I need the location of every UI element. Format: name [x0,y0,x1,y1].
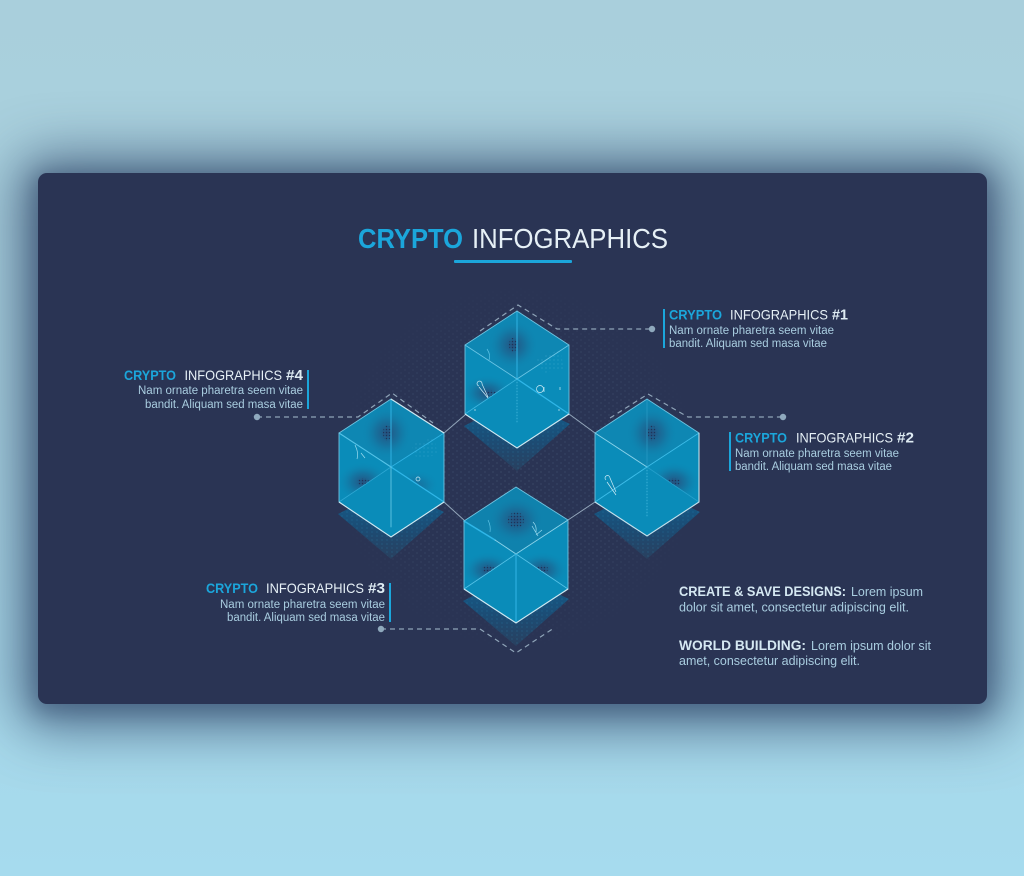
text block: create and save designs: CREATE & SAVE DESIGNS: [679,584,846,599]
title underline [454,260,572,263]
cube 1: top [461,311,570,471]
text block: infographics 2: CRYPTO [735,430,787,446]
dotted background circle [356,300,678,634]
text block: infographics 2 [729,430,914,473]
panel: dark slide [38,173,987,704]
text block: infographics 3: Nam ornate pharetra seem vitae [220,599,385,611]
text block: infographics 3 [206,580,391,624]
text block: world building [679,638,931,668]
dashed leader 1 [480,305,655,332]
text block: create and save designs: dolor sit amet, consectetur adipiscing elit. [679,600,909,614]
text block: infographics 3: INFOGRAPHICS [266,580,364,596]
icon: small drawn marks [488,520,542,536]
text block: create and save designs: Lorem ipsum [851,584,923,599]
text block: infographics 4: Nam ornate pharetra seem vitae [138,385,303,397]
icon: small drawn marks [355,445,420,481]
text block: infographics 4: CRYPTO [124,367,176,383]
text block: infographics 3: bandit. Aliquam sed masa vitae [227,612,385,624]
dashed leader 3 [378,626,554,653]
text block: world building: Lorem ipsum dolor sit [811,638,931,653]
text block: infographics 4 [124,367,309,411]
cube 3: bottom [462,487,569,646]
text block: infographics 4: INFOGRAPHICS [184,367,282,383]
text block: infographics 2: INFOGRAPHICS [796,430,893,446]
text block: infographics 4: #4 [286,368,303,384]
text block: infographics 1: CRYPTO [669,306,722,322]
text block: infographics 1: bandit. Aliquam sed masa vitae [669,338,827,350]
text block: create and save designs [679,584,923,614]
text block: world building: WORLD BUILDING: [679,638,806,653]
text block: infographics 1 [663,306,848,350]
text block: infographics 1: #1 [832,308,848,324]
text block: infographics 2: Nam ornate pharetra seem vitae [735,448,899,460]
icon: small drawn marks [475,349,560,411]
cube 2: right [594,399,700,559]
text block: infographics 2: #2 [897,430,914,446]
title [358,223,668,254]
dashed leader 2 [610,394,786,420]
icon: small drawn marks [605,476,616,495]
text block: infographics 1: Nam ornate pharetra seem vitae [669,325,834,337]
connector lines between cubes [444,414,595,521]
text block: world building: amet, consectetur adipiscing elit. [679,653,860,668]
text block: infographics 2: bandit. Aliquam sed masa vitae [735,461,892,473]
title: CRYPTO [358,223,463,254]
text block: infographics 1: INFOGRAPHICS [730,306,828,322]
infographic canvas [124,228,931,668]
text block: infographics 3: #3 [368,581,385,597]
title: INFOGRAPHICS [472,223,668,254]
text block: infographics 4: bandit. Aliquam sed masa vitae [145,399,303,411]
text block: infographics 3: CRYPTO [206,580,258,596]
dashed leader 4 [254,393,433,423]
cube 4: left [337,399,444,559]
